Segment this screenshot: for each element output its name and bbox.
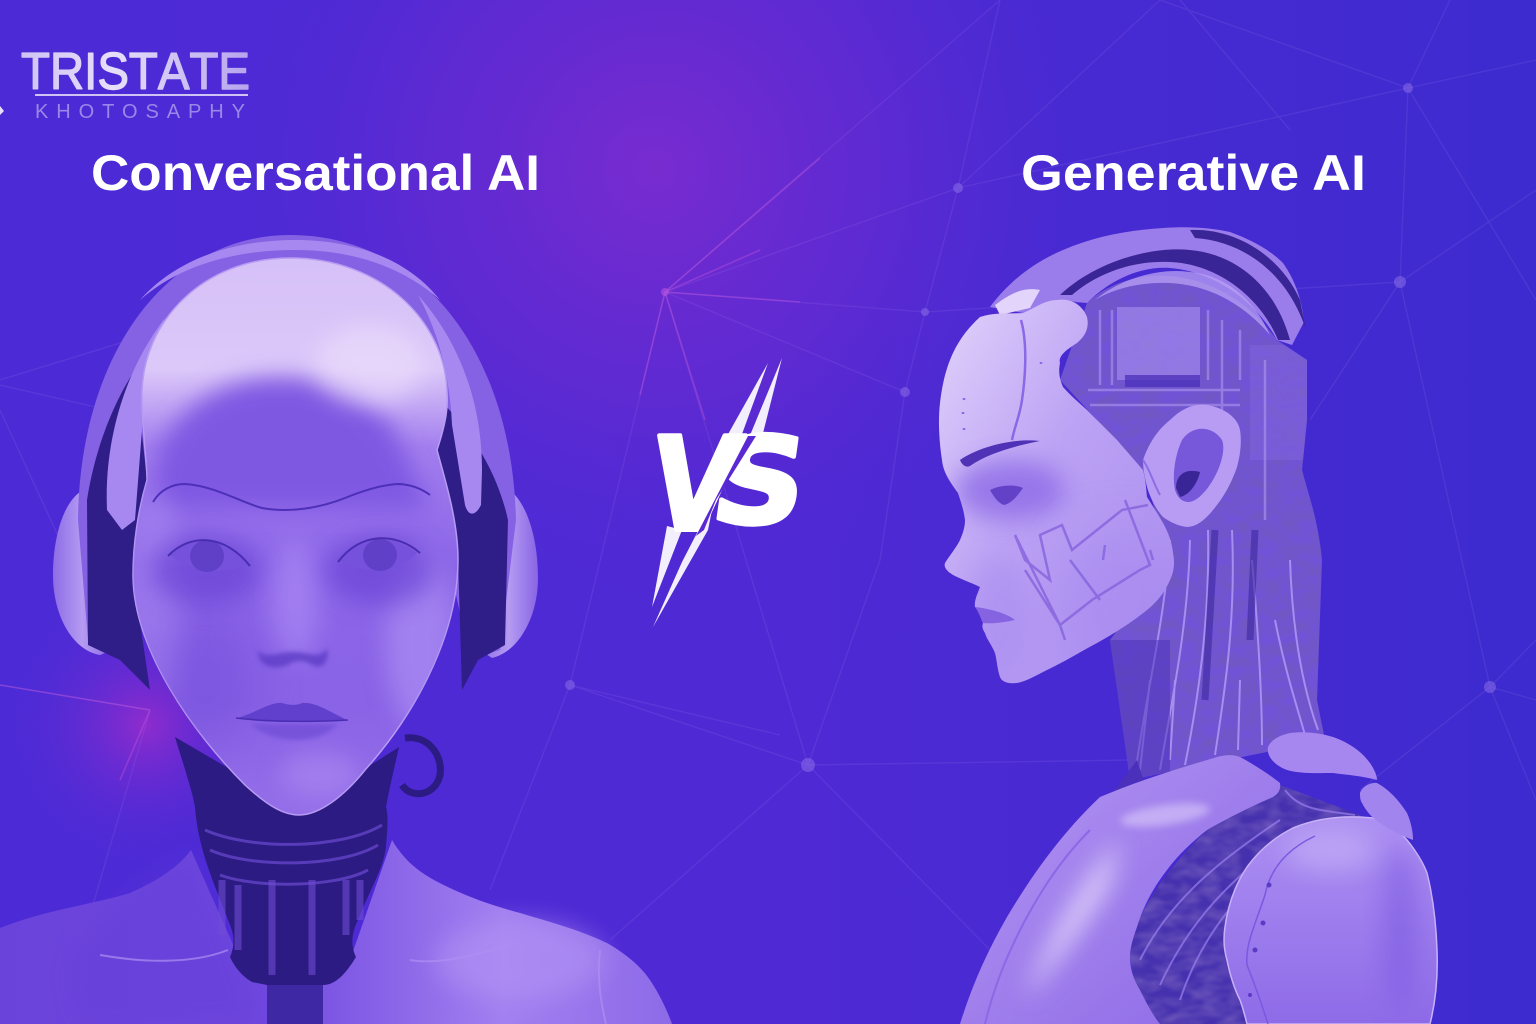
android neck shadow — [1100, 760, 1145, 815]
skull highlight — [995, 289, 1040, 315]
vs badge — [641, 358, 816, 627]
letter S: S — [704, 413, 816, 552]
shoulder pad upper — [1268, 732, 1377, 780]
right ear cup — [480, 490, 538, 658]
robot head — [125, 258, 458, 815]
android chest armor — [960, 755, 1280, 1024]
pink highlight lines near the central node — [0, 158, 820, 780]
shoulder pad lower — [1360, 783, 1413, 840]
logo side marker — [0, 106, 4, 115]
android torso mesh — [1130, 785, 1360, 1024]
heading: Conversational AI: Conversational AI — [91, 145, 540, 201]
android face — [939, 300, 1180, 683]
logo wordmark: TRISTATE — [21, 43, 250, 101]
slash gap — [696, 436, 756, 536]
nose — [258, 648, 328, 667]
android eye — [990, 486, 1023, 505]
figure: generative AI android in profile — [939, 227, 1437, 1024]
cheek circuit markings — [1015, 500, 1153, 640]
brow line — [153, 484, 430, 510]
figure: conversational AI robot with headset — [0, 235, 672, 1024]
skull dark edge — [1060, 230, 1306, 340]
headset band — [78, 235, 516, 660]
network nodes — [565, 83, 1496, 772]
logo tagline: KHOTOSAPHY — [35, 101, 245, 123]
lips — [236, 703, 348, 740]
logo rule — [35, 94, 248, 96]
letter V: V — [641, 410, 750, 561]
heading: Generative AI: Generative AI — [1021, 145, 1366, 201]
android ear — [1143, 405, 1241, 527]
android shoulder — [1224, 817, 1437, 1024]
left eye — [168, 540, 250, 572]
android brow — [960, 440, 1040, 467]
forehead dots and seam — [963, 320, 1041, 440]
android rear circuitry and wires — [1060, 276, 1324, 778]
left ear cup — [53, 490, 112, 655]
robot neck — [175, 737, 399, 1024]
lightning spikes — [652, 358, 782, 627]
neck ring — [402, 738, 440, 794]
right eye — [338, 538, 420, 571]
android lips — [975, 607, 1015, 623]
logo: Tristate Photography — [21, 43, 250, 123]
robot shoulders — [0, 840, 672, 1024]
android skull cap — [990, 227, 1304, 345]
headset light strips — [107, 240, 482, 530]
headset dark inner — [87, 370, 508, 690]
